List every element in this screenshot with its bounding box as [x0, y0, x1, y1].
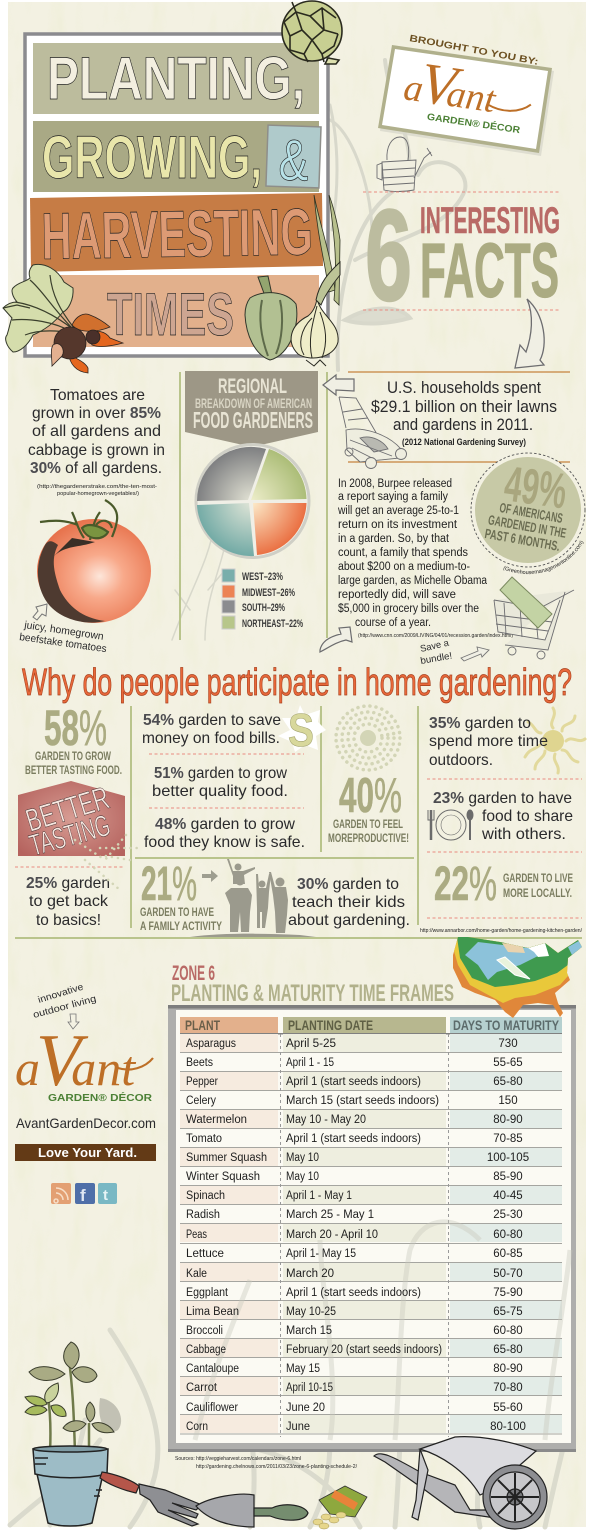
website: AvantGardenDecor.com [16, 1115, 156, 1131]
stat: 40 percent: 40% [339, 769, 402, 823]
row: cantaloupe [186, 1363, 523, 1375]
row: carrot: April 10-15 [286, 1382, 333, 1394]
stat: 23 percent: with others. [481, 826, 566, 843]
illustration: seedlings in pot [25, 1342, 121, 1526]
row: broccoli: Broccoli [186, 1325, 223, 1337]
bottom background stems [10, 1256, 570, 1527]
row: peas: 60-80 [493, 1229, 523, 1241]
panel: regional breakdown [185, 371, 318, 630]
row: beets: Beets [186, 1057, 213, 1069]
sources [175, 1456, 357, 1470]
row: spinach [186, 1190, 523, 1202]
sources: Sources: http://veggieharvest.com/calendars/zone-6.html [175, 1456, 301, 1462]
illustration: seed packet [313, 1486, 367, 1529]
row: asparagus: 730 [498, 1038, 518, 1050]
social icons: f [80, 1186, 86, 1205]
row: carrot: 70-80 [493, 1382, 523, 1394]
row: watermelon [186, 1114, 523, 1126]
row: radish [186, 1209, 523, 1221]
row: cantaloupe: 80-90 [493, 1363, 523, 1375]
stat: 23 percent: food to share [482, 808, 573, 825]
source: greenhouse url: (Greenhousemanagementonline.com) [504, 540, 584, 574]
fact: tomatoes: (http://thegardenerstrake.com/the-ten-most- [37, 484, 157, 490]
header row: DAYS TO MATURITY [453, 1017, 560, 1033]
stat: 51 percent: better quality food. [152, 783, 288, 800]
row: lima bean [186, 1306, 523, 1318]
stat: 54 percent: money on food bills. [142, 730, 280, 747]
ampersand tile: & [278, 128, 310, 194]
heading: zone 6: ZONE 6 [172, 962, 215, 985]
stat: 30 percent [288, 876, 410, 929]
fact: burpee paragraph [337, 478, 513, 639]
tagline [32, 982, 98, 1021]
illustration: pepper [245, 276, 297, 360]
fact: lawn spending [348, 372, 570, 462]
arrow: pointing left [323, 375, 354, 395]
banner: BREAKDOWN OF AMERICAN [195, 395, 312, 411]
row: winter squash [186, 1171, 523, 1183]
fact: lawn spending: $29.1 billion on their lawns [371, 397, 557, 416]
illustration: radish bunch [3, 264, 123, 373]
row: summer squash: Summer Squash [186, 1152, 267, 1164]
stat: 23 percent [433, 790, 573, 843]
row: pepper: 65-80 [493, 1076, 523, 1088]
row shading [180, 1034, 562, 1437]
fact: burpee paragraph: will get an average 25-to-1 [337, 505, 459, 517]
title block [25, 34, 328, 356]
row: asparagus: Asparagus [186, 1038, 236, 1050]
fact: burpee paragraph: large garden, as Michelle Obama [338, 575, 488, 587]
row: tomato: Tomato [186, 1133, 222, 1145]
legend: SOUTH–29% [242, 602, 285, 614]
row: lima bean: May 10-25 [286, 1306, 336, 1318]
row: pepper: Pepper [186, 1076, 218, 1088]
stat: 22 percent [434, 858, 573, 911]
stat: 51 percent: 51% garden to grow [154, 765, 287, 782]
row: tomato [186, 1133, 523, 1145]
note: save a bundle [419, 638, 489, 667]
row: eggplant: 75-90 [493, 1287, 523, 1299]
caption: juicy tomatoes: juicy, homegrown [23, 619, 105, 643]
stat: 23 percent: 23% garden to have [433, 790, 572, 807]
fact: burpee paragraph: a report saying a family [338, 491, 448, 503]
fact: burpee paragraph: in a garden. So, by that [338, 533, 450, 545]
row: winter squash: May 10 [286, 1171, 319, 1183]
badge: 49 percent: PAST 6 MONTHS. [484, 526, 561, 554]
stat: 48 percent: 48% garden to grow [155, 816, 295, 833]
fact: burpee paragraph: $5,000 in grocery bills over the [338, 603, 479, 615]
row: pepper: April 1 (start seeds indoors) [286, 1076, 421, 1088]
band: growing: GROWING, [42, 124, 262, 191]
banner: FOOD GARDENERS [193, 407, 313, 433]
fact: tomatoes: of all gardens and [32, 423, 161, 440]
row: peas: Peas [186, 1229, 207, 1241]
caption: juicy tomatoes [19, 619, 107, 655]
map: US hardiness zones [453, 937, 582, 1018]
row: peas: March 20 - April 10 [286, 1229, 378, 1241]
illustration: hand fork [100, 1472, 202, 1526]
header row [180, 1017, 562, 1034]
row: asparagus [186, 1038, 518, 1050]
row: eggplant: Eggplant [186, 1287, 229, 1299]
row: summer squash: May 10 [286, 1152, 319, 1164]
illustration: artichoke [282, 1, 342, 64]
row: spinach: Spinach [186, 1190, 225, 1202]
sponsor logo card [378, 45, 554, 156]
background floral flourish [172, 60, 465, 640]
sunburst dots behind family stat [75, 835, 140, 890]
stat: 35 percent: outdoors. [429, 752, 493, 769]
band: harvesting [30, 193, 323, 273]
logo wordmark [399, 48, 537, 137]
row: lettuce: 60-85 [493, 1248, 523, 1260]
radish roots [51, 314, 123, 373]
stat: 25 percent: to get back [29, 893, 109, 910]
header row: PLANTING DATE [288, 1017, 373, 1033]
fact: tomatoes: Tomatoes are [50, 387, 145, 404]
title frame [25, 34, 328, 356]
stat: 54 percent [142, 712, 281, 747]
row: winter squash: 85-90 [493, 1171, 523, 1183]
row: beets [186, 1057, 523, 1069]
stat: 21 percent: A FAMILY ACTIVITY [140, 919, 222, 933]
row: cabbage: 65-80 [493, 1344, 523, 1356]
row: radish: Radish [186, 1209, 220, 1221]
row: eggplant [186, 1287, 523, 1299]
row: lettuce: Lettuce [186, 1248, 224, 1260]
icon: plate and cutlery [428, 810, 473, 840]
legend: WEST–23% [242, 571, 283, 583]
row: corn [186, 1421, 526, 1433]
row: broccoli: 60-80 [493, 1325, 523, 1337]
illustration: onion greens [314, 195, 340, 305]
heading: 6 interesting facts: 6 [365, 182, 412, 328]
stat: 35 percent: spend more time [429, 733, 548, 750]
row: corn: June [286, 1421, 310, 1433]
row: corn: 80-100 [490, 1421, 526, 1433]
band: times: TIMES [107, 281, 234, 348]
stems [48, 1360, 89, 1453]
illustration: wheelbarrow [374, 1437, 547, 1529]
row: tomato: 70-85 [493, 1133, 523, 1145]
illustration: trowel [196, 1494, 308, 1527]
stat: 58 percent: GARDEN TO GROW [35, 749, 111, 763]
source: annarbor url: http://www.annarbor.com/home-garden/home-gardening-kitchen-garden/ [420, 928, 582, 934]
fact: tomatoes [28, 387, 165, 497]
row: pepper [186, 1076, 523, 1088]
dashed rule bottom [363, 309, 560, 311]
logo wordmark: GARDEN® DÉCOR [426, 112, 521, 136]
table watermark stems [195, 1222, 570, 1440]
band: planting: PLANTING, [47, 45, 305, 112]
row: celery: March 15 (start seeds indoors) [286, 1095, 439, 1107]
row: peas [186, 1229, 523, 1241]
fact: burpee paragraph: return on its investment [338, 519, 458, 531]
note: save a bundle: Save a [419, 638, 451, 655]
dashed rule top [363, 191, 560, 193]
logo wordmark: GARDEN® DÉCOR [48, 1091, 152, 1104]
stat: 48 percent: food they know is safe. [144, 834, 305, 851]
plant shadow [99, 1398, 121, 1432]
illustration: family silhouette [190, 859, 316, 937]
illustration: beefsteak tomato [37, 500, 151, 623]
stat: 22 percent: MORE LOCALLY. [503, 886, 572, 900]
row: cabbage: Cabbage [186, 1344, 226, 1356]
row: cauliflower: Cauliflower [186, 1402, 238, 1414]
table frame [168, 1005, 576, 1452]
row: celery: 150 [498, 1095, 518, 1107]
heading: zone 6 [171, 962, 454, 1007]
row: summer squash [186, 1152, 529, 1164]
row: cauliflower: June 20 [286, 1402, 325, 1414]
stat: 40 percent: MOREPRODUCTIVE! [328, 831, 409, 845]
row: winter squash: Winter Squash [186, 1171, 260, 1183]
tagline: innovative [37, 982, 85, 1006]
band: times [33, 275, 319, 348]
caption: juicy tomatoes: beefstake tomatoes [19, 631, 107, 655]
fact: lawn spending: (2012 National Gardening Survey) [402, 437, 526, 447]
banner: REGIONAL [218, 375, 287, 398]
fact: tomatoes: grown in over 85% [32, 405, 161, 422]
logo wordmark: aVant [15, 1020, 136, 1102]
row: kale [186, 1268, 523, 1280]
stat: 25 percent: 25% garden [26, 875, 110, 892]
stat: 48 percent [144, 816, 305, 851]
row: carrot [186, 1382, 523, 1394]
row: cabbage [186, 1344, 523, 1356]
sources: http://gardening.chelnows.com/2011/03/23/zone-6-planting-schedule-2/ [196, 1464, 357, 1470]
fact: burpee paragraph: (http://www.cnn.com/2009/LIVING/04/01/recession.garden/index.html) [358, 633, 513, 639]
logo wordmark: aVant [400, 48, 502, 125]
banner [185, 371, 318, 447]
legend [222, 569, 303, 630]
row: broccoli: March 15 [286, 1325, 332, 1337]
planting table [168, 1005, 576, 1452]
fact: lawn spending: U.S. households spent [387, 378, 541, 397]
stat: 58 percent: BETTER TASTING FOOD. [25, 763, 122, 777]
row: broccoli [186, 1325, 523, 1337]
row: tomato: April 1 (start seeds indoors) [286, 1133, 421, 1145]
row: spinach: 40-45 [493, 1190, 523, 1202]
row: cabbage: February 20 (start seeds indoors) [286, 1344, 442, 1356]
row: kale: 50-70 [493, 1268, 523, 1280]
stat: 25 percent [26, 875, 110, 929]
stat: 22 percent: 22% [434, 858, 497, 911]
stat: 30 percent: about gardening. [288, 912, 410, 929]
row: radish: 25-30 [493, 1209, 523, 1221]
arrow: hand-drawn down arrow [515, 299, 544, 368]
love your yard banner [15, 1144, 156, 1161]
row: celery: Celery [186, 1095, 216, 1107]
row: asparagus: April 5-25 [286, 1038, 336, 1050]
fact: burpee paragraph: count, a family that spends [338, 547, 468, 559]
row: radish: March 25 - May 1 [286, 1209, 374, 1221]
fact: burpee paragraph: In 2008, Burpee released [338, 478, 452, 490]
tomato stem [40, 500, 117, 540]
badge: 49 percent [471, 453, 585, 567]
illustration: onion [291, 262, 340, 366]
arrow: curved right arrow [320, 627, 352, 652]
radish leaves [3, 264, 74, 352]
row: watermelon: May 10 - May 20 [286, 1114, 366, 1126]
note: save a bundle: bundle! [420, 651, 453, 667]
icon: dollar burst: S [288, 704, 314, 756]
stat: 58 percent: 58% [44, 700, 107, 756]
icon: watering can [377, 137, 432, 192]
row: cauliflower [186, 1402, 523, 1414]
icon: dollar burst [278, 704, 326, 756]
row: eggplant: April 1 (start seeds indoors) [286, 1287, 421, 1299]
love your yard banner: Love Your Yard. [38, 1145, 137, 1160]
row: watermelon: Watermelon [186, 1114, 247, 1126]
row: lettuce [186, 1248, 523, 1260]
row: lima bean: 65-75 [493, 1306, 523, 1318]
stat: 51 percent [152, 765, 288, 800]
row: kale: March 20 [286, 1268, 334, 1280]
icon: dotted sunburst [336, 706, 400, 770]
stat: 58 percent [25, 700, 122, 777]
leaves [25, 1342, 114, 1433]
sponsor tag: brought to you by: BROUGHT TO YOU BY: [408, 33, 539, 68]
band: harvesting: HARVESTING [41, 194, 313, 273]
stat: 54 percent: 54% garden to save [143, 712, 281, 729]
fact: tomatoes: cabbage is grown in [28, 442, 165, 459]
social icons [51, 1183, 117, 1205]
stat: 21 percent: GARDEN TO HAVE [140, 905, 214, 919]
icon: shopping cart with bill [494, 577, 574, 659]
pot [33, 1446, 108, 1526]
row: watermelon: 80-90 [493, 1114, 523, 1126]
tagline: outdoor living [32, 993, 98, 1021]
stat: 35 percent: 35% garden to [429, 715, 531, 732]
badge: 49 percent: OF AMERICANS [498, 500, 564, 526]
row: kale: Kale [186, 1268, 207, 1280]
legend: MIDWEST–26% [242, 587, 295, 599]
stat: 30 percent: 30% garden to [297, 876, 399, 893]
icon: sun [525, 708, 585, 773]
sign: better tasting [18, 779, 125, 863]
fact: burpee paragraph: course of a year. [355, 617, 431, 629]
legend: NORTHEAST–22% [242, 618, 303, 630]
arrow: tagline down [68, 1014, 79, 1029]
arrow: small up arrow [33, 604, 47, 620]
row: cantaloupe: Cantaloupe [186, 1363, 239, 1375]
stat: 21 percent: 21% [141, 858, 197, 911]
row: carrot: Carrot [186, 1382, 218, 1394]
row: beets: April 1 - 15 [286, 1057, 334, 1069]
row: lettuce: April 1- May 15 [286, 1248, 356, 1260]
pie chart [194, 443, 310, 559]
row: beets: 55-65 [493, 1057, 523, 1069]
sign: better tasting: BETTER [22, 779, 113, 839]
row: celery [186, 1095, 518, 1107]
icon: lawnmower [339, 397, 406, 468]
fact: tomatoes: 30% of all gardens. [30, 460, 162, 477]
stat: 25 percent: to basics! [36, 912, 101, 929]
row: summer squash: 100-105 [487, 1152, 529, 1164]
stat: 30 percent: teach their kids [292, 894, 405, 911]
stat: 40 percent [328, 769, 409, 845]
row: cauliflower: 55-60 [493, 1402, 523, 1414]
fact: burpee paragraph: reportedly did, will save [338, 589, 456, 601]
row: lima bean: Lima Bean [186, 1306, 239, 1318]
stat: 40 percent: GARDEN TO FEEL [333, 817, 403, 831]
heading: 6 interesting facts [365, 182, 560, 328]
sign: better tasting: TASTING [26, 809, 114, 863]
row: cantaloupe: May 15 [286, 1363, 320, 1375]
fact: tomatoes: popular-homegrown-vegetables/) [57, 491, 139, 497]
sidebar: avant brand [15, 982, 156, 1205]
row: corn: Corn [186, 1421, 208, 1433]
fact: burpee paragraph: about $200 on a medium-to- [338, 561, 470, 573]
fact: lawn spending: and gardens in 2011. [393, 415, 533, 434]
social icons: t [103, 1187, 108, 1204]
header row: PLANT [185, 1017, 220, 1033]
stat: 35 percent [429, 715, 548, 769]
row: spinach: April 1 - May 1 [286, 1190, 352, 1202]
stat: 21 percent [140, 858, 222, 933]
